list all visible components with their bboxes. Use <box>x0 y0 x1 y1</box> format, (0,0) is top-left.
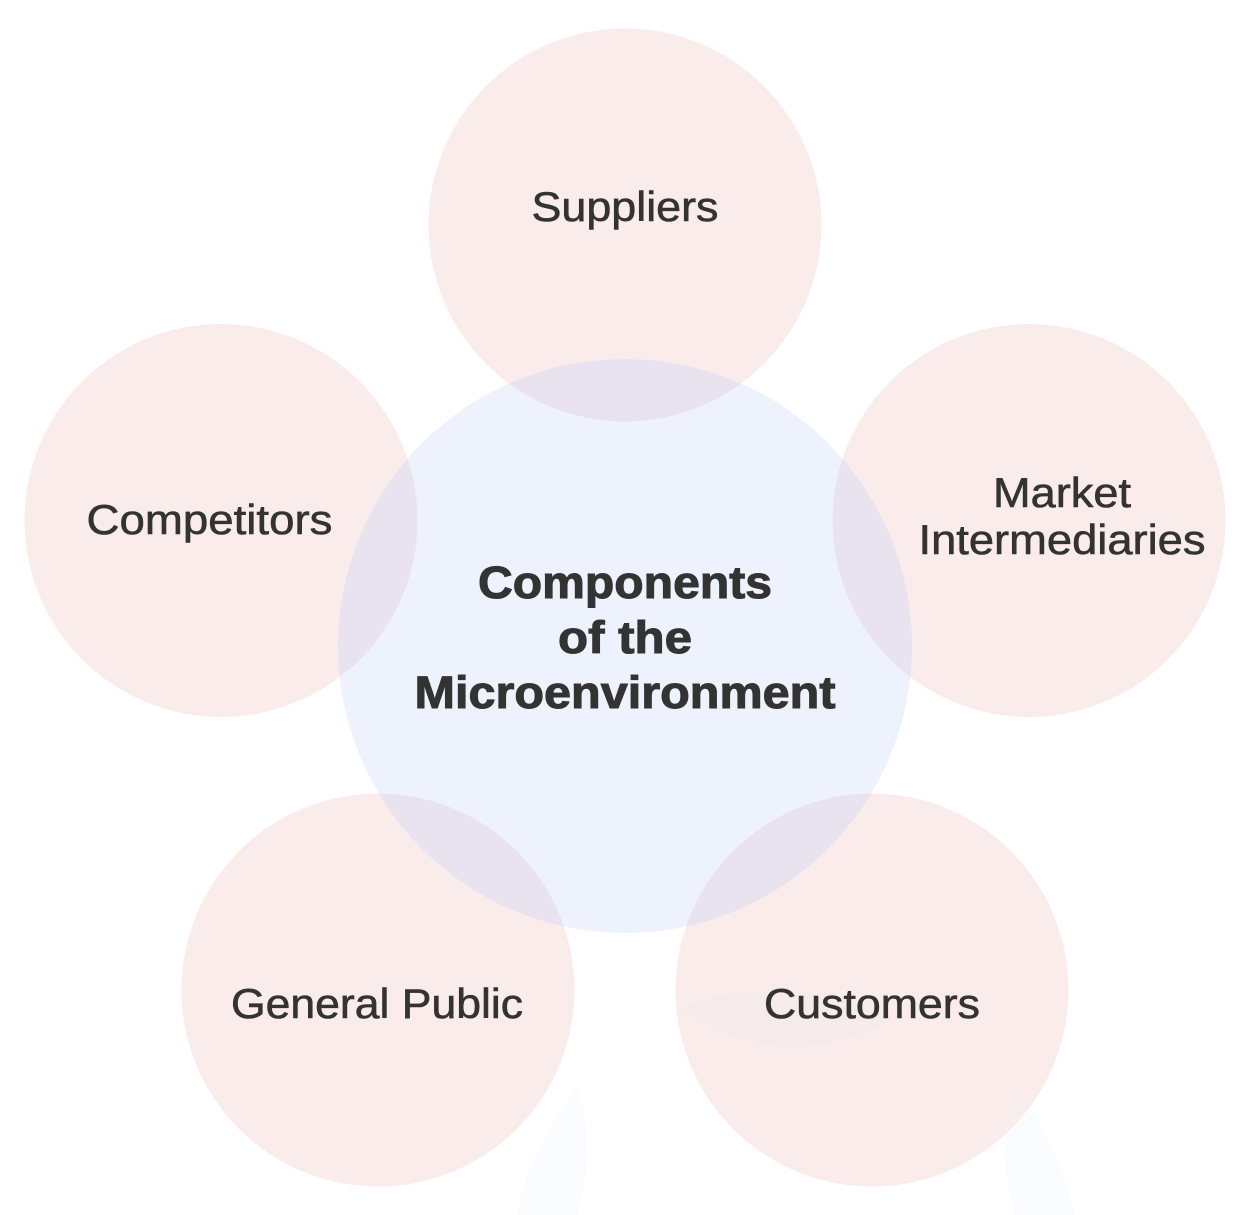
heading: components of the microenvironment: Components <box>478 557 772 608</box>
label: market intermediaries: Market <box>993 469 1131 516</box>
heading: components of the microenvironment: Microenvironment <box>414 667 836 718</box>
circle: general public <box>182 794 574 1186</box>
label: market intermediaries: Intermediaries <box>918 516 1206 563</box>
label: general public: General Public <box>231 980 523 1027</box>
label: suppliers: Suppliers <box>532 183 718 230</box>
label: customers: Customers <box>764 980 980 1027</box>
ghost lens inside customers circle <box>682 990 892 1046</box>
circle: central <box>338 359 912 933</box>
ghost leaf overlap inside customers circle <box>1005 1087 1075 1215</box>
circle: competitors <box>24 324 418 717</box>
heading: components of the microenvironment: of the <box>558 612 692 663</box>
label: competitors: Competitors <box>86 496 332 543</box>
overlaps with central circle <box>338 359 912 926</box>
ghost leaf: right <box>1005 1087 1075 1215</box>
heading: components of the microenvironment <box>414 557 836 718</box>
circle: customers <box>676 794 1068 1186</box>
circle: suppliers <box>428 28 822 422</box>
circle: market intermediaries <box>832 324 1226 717</box>
label: market intermediaries <box>918 469 1206 563</box>
ghost leaf: left <box>517 1087 587 1215</box>
